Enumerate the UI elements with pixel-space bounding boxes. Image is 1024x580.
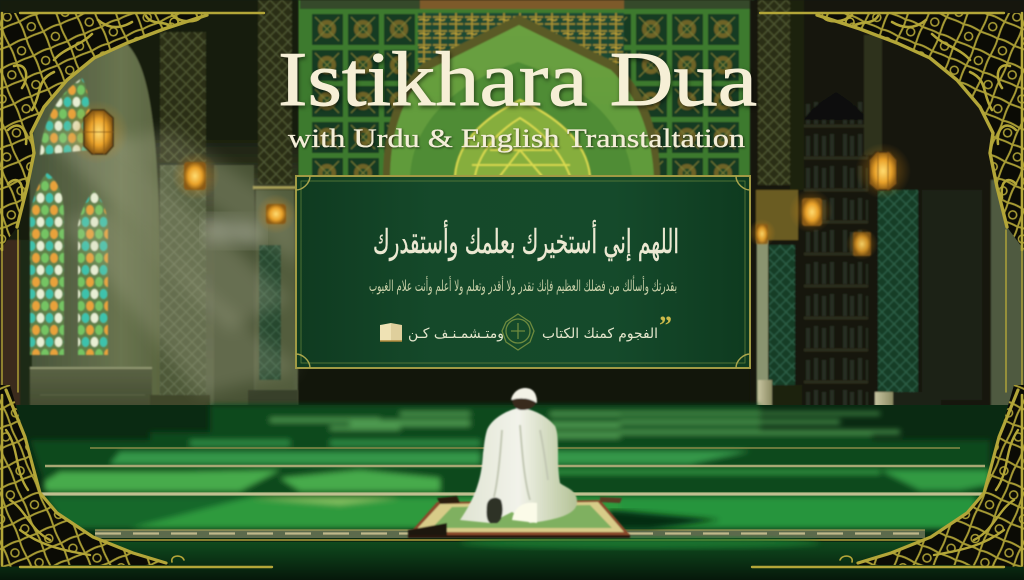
icon: medallion bbox=[502, 314, 534, 350]
second row bbox=[110, 451, 750, 464]
Urdu third line left: ومتـشمـنـف كـن bbox=[408, 326, 504, 342]
carpeted floor bbox=[0, 405, 1024, 580]
stained glass windows bbox=[30, 78, 108, 355]
skull cap bbox=[511, 388, 537, 403]
fourth row bbox=[130, 497, 640, 528]
Urdu third line right: الفجوم كمنك الكتاب bbox=[542, 326, 658, 342]
second foot bbox=[512, 503, 537, 523]
ornament: bottom-right corner bbox=[752, 385, 1024, 567]
left wall with lit recess bbox=[0, 0, 298, 440]
foreground shade bbox=[0, 542, 1024, 580]
golden lattice dome bbox=[455, 100, 590, 176]
Arabic second line: بقدرتك وأسألك من فضلك العظيم فإنك تقدر ولا أقدر وتعلم ولا أعلم وأنت علام الغيوب bbox=[369, 275, 677, 295]
top centre tiled wall bbox=[298, 0, 754, 180]
icon: quote marks: ” bbox=[659, 311, 672, 340]
robe bbox=[460, 408, 577, 523]
distant light stripes bbox=[270, 412, 900, 438]
head bbox=[512, 398, 537, 410]
title: Istikhara Dua bbox=[278, 36, 757, 122]
icon: open book bbox=[380, 323, 402, 341]
light beams bbox=[40, 130, 300, 395]
praying man in white bbox=[460, 388, 577, 523]
person shadow bbox=[600, 510, 720, 529]
carpet stripes bbox=[90, 447, 960, 449]
foot sole bbox=[486, 498, 503, 523]
ornament: top-left corner bbox=[0, 13, 264, 395]
lanterns bbox=[65, 100, 911, 260]
subtitle: with Urdu & English Transtaltation bbox=[288, 124, 745, 153]
Arabic heading line: اللهم إني أستخيرك بعلمك وأستقدرك bbox=[373, 220, 679, 262]
left columns bbox=[150, 0, 298, 435]
ornament: bottom-left corner bbox=[0, 385, 272, 567]
panel: dua text bbox=[296, 176, 750, 368]
ornament: top-right corner bbox=[760, 13, 1024, 395]
centre arch bbox=[383, 15, 660, 178]
right wall, columns and bookshelf bbox=[750, 0, 1024, 435]
prayer rug bbox=[408, 496, 630, 538]
third row bbox=[44, 470, 440, 491]
